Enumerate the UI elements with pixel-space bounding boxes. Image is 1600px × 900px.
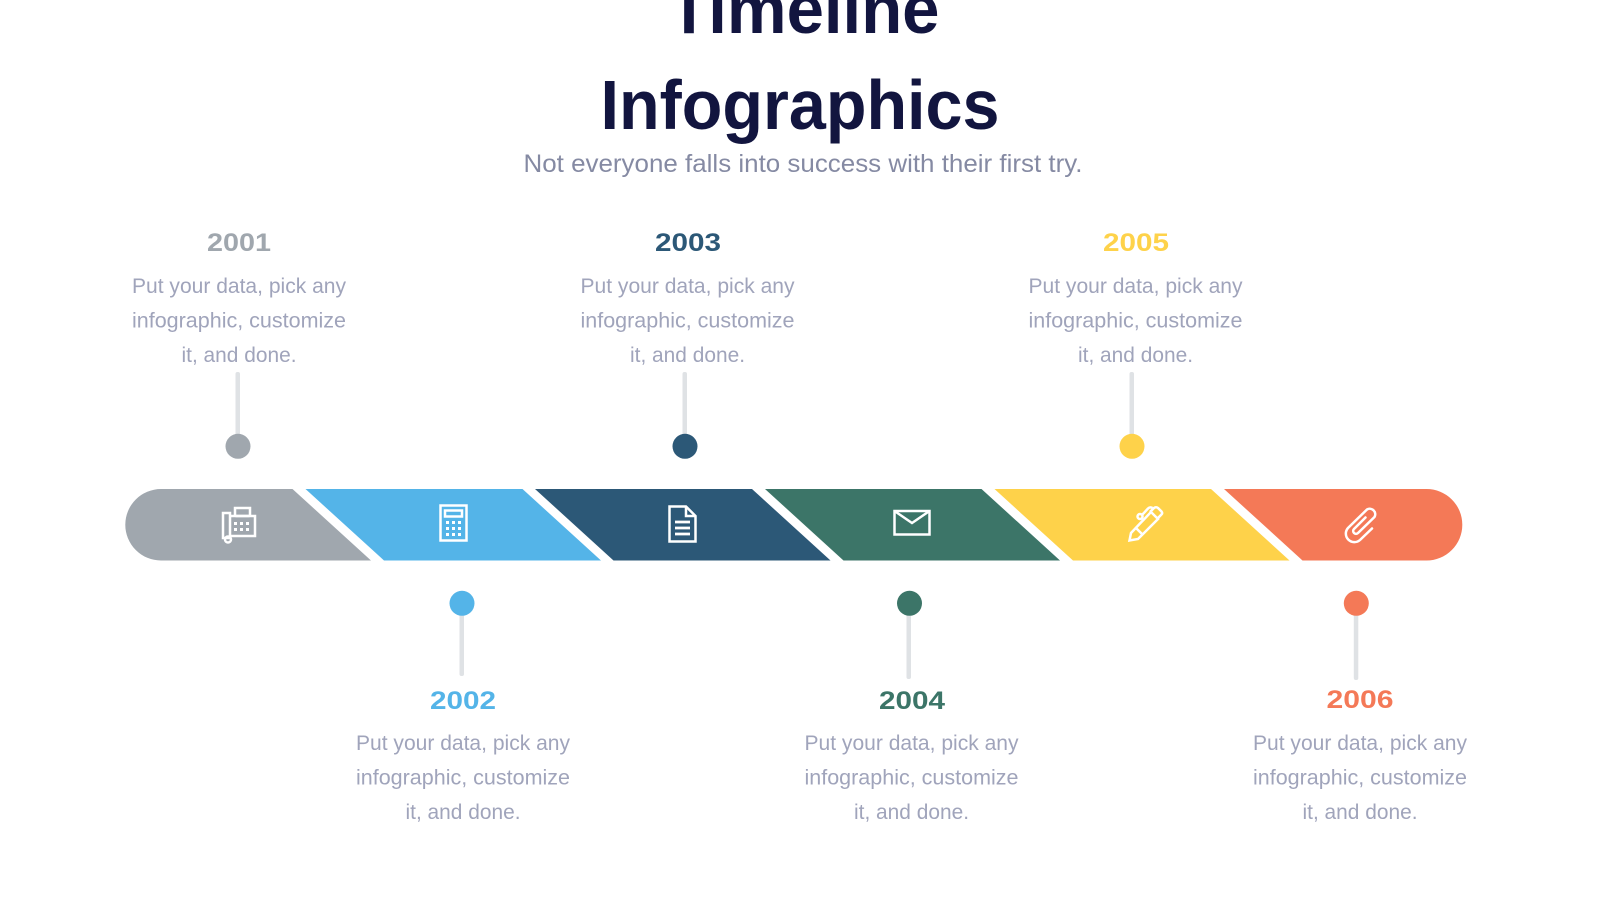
description: infographic, customize [356, 766, 570, 790]
pin [1120, 372, 1144, 459]
icon: document [670, 506, 696, 542]
segment: 2001 grey [125, 489, 371, 560]
description [356, 732, 570, 824]
year: 2001 [207, 229, 271, 257]
milestone 2004 [804, 591, 1019, 824]
description: Put your data, pick any [1028, 275, 1243, 298]
segment: 2006 orange [1224, 489, 1462, 560]
icon: paperclip [1346, 509, 1375, 542]
segment: 2003 navy [535, 489, 830, 560]
icon: pen [1130, 507, 1162, 540]
milestone 2003 [580, 229, 795, 459]
description: it, and done. [854, 801, 969, 824]
description [580, 275, 795, 367]
title [600, 0, 1000, 144]
description: Put your data, pick any [580, 275, 795, 298]
description [132, 275, 346, 367]
year: 2002 [430, 687, 496, 715]
year: 2003 [655, 229, 721, 257]
timeline bar [125, 489, 1462, 560]
segment: 2005 yellow [994, 489, 1290, 560]
description: Put your data, pick any [1253, 732, 1467, 755]
year: 2004 [879, 687, 945, 715]
milestone 2001 [132, 229, 346, 459]
segment: 2002 blue [306, 489, 601, 560]
description: it, and done. [182, 344, 296, 367]
milestone 2005 [1028, 229, 1243, 459]
pin [226, 372, 250, 459]
description: infographic, customize [132, 310, 346, 332]
milestone 2006 [1253, 591, 1467, 824]
pin [897, 591, 922, 679]
segment: 2004 green [765, 489, 1060, 560]
milestone 2002 [356, 591, 570, 824]
description: Put your data, pick any [132, 275, 346, 298]
description [1028, 275, 1243, 367]
description: infographic, customize [804, 766, 1018, 790]
description: infographic, customize [1253, 766, 1467, 790]
description: Put your data, pick any [356, 732, 570, 755]
subtitle: Not everyone falls into success with their first try. [524, 150, 1082, 178]
description: it, and done. [630, 344, 745, 367]
pin [450, 591, 474, 676]
year: 2005 [1103, 229, 1169, 257]
description: infographic, customize [580, 310, 794, 332]
year: 2006 [1326, 686, 1394, 714]
icon: calculator [440, 506, 466, 540]
description: Put your data, pick any [804, 732, 1019, 755]
description [804, 732, 1019, 824]
description: infographic, customize [1028, 310, 1242, 332]
pin [672, 372, 698, 459]
description: it, and done. [1078, 344, 1193, 367]
description: it, and done. [406, 801, 520, 824]
pin [1344, 591, 1369, 680]
description [1253, 732, 1467, 824]
icon: fax [223, 508, 255, 542]
icon: envelope [894, 511, 930, 534]
description: it, and done. [1302, 801, 1418, 824]
title: Infographics [600, 66, 1000, 144]
